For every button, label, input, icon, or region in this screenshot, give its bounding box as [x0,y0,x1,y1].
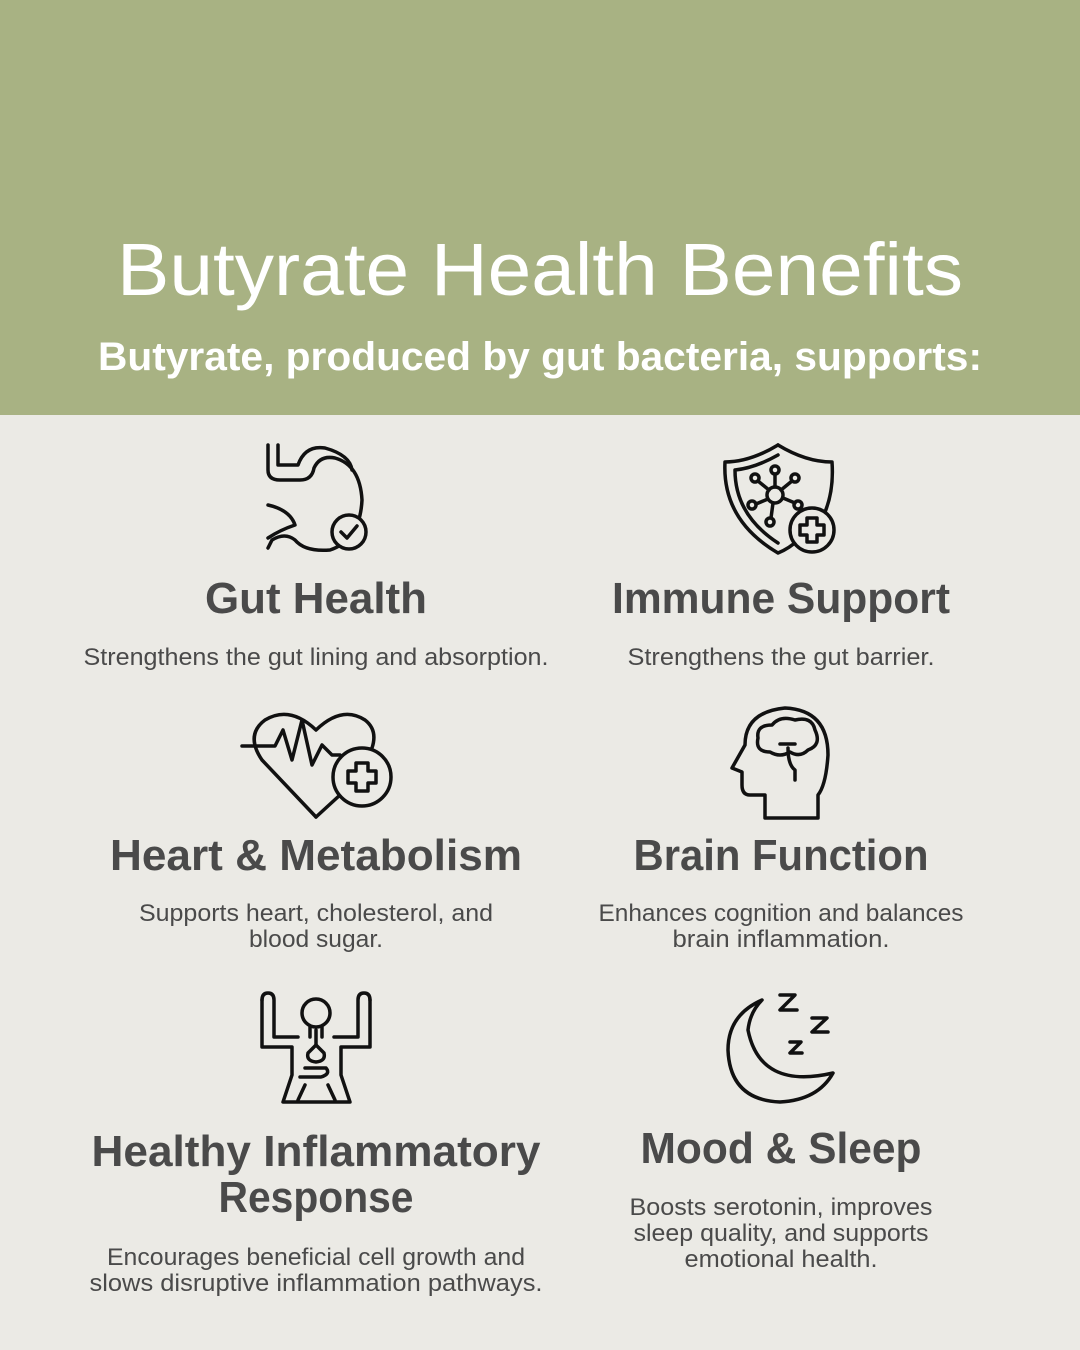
text: Strengthens the gut barrier. [628,644,934,671]
text [90,1244,542,1297]
panel: mood and sleep [630,995,932,1273]
title: Butyrate Health Benefits [117,228,963,311]
text: sleep quality, and supports [634,1220,928,1247]
text: slows disruptive inflammation pathways. [90,1270,542,1297]
text: Encourages beneficial cell growth and [107,1244,525,1271]
text [598,900,964,953]
icon: moon [728,995,833,1102]
heading: Brain Function [634,831,928,880]
icon: heart [242,714,391,817]
text: emotional health. [684,1246,878,1273]
icon: stomach [268,445,366,550]
heading [92,1127,541,1222]
panel: heart and metabolism [110,714,522,953]
panel: brain function [598,708,964,953]
text [139,900,493,953]
text: brain inflammation. [672,926,890,953]
text: Boosts serotonin, improves [630,1194,932,1221]
subtitle: Butyrate, produced by gut bacteria, supports: [98,335,982,379]
text: Enhances cognition and balances [598,900,964,927]
heading: Healthy Inflammatory [92,1127,541,1176]
panel: healthy inflammatory response [90,993,542,1297]
icon: body [262,993,370,1102]
heading: Heart & Metabolism [110,831,522,880]
icon: shield [725,445,834,553]
text: Supports heart, cholesterol, and [139,900,493,927]
heading: Response [218,1173,414,1222]
heading: Immune Support [612,574,950,623]
heading: Gut Health [205,574,427,623]
icon: head with brain [732,708,828,818]
heading: Mood & Sleep [640,1124,922,1173]
panel: gut health [84,445,548,671]
text: Strengthens the gut lining and absorption. [84,644,548,671]
panel: immune support [612,445,950,671]
text [630,1194,932,1273]
text: blood sugar. [249,926,383,953]
